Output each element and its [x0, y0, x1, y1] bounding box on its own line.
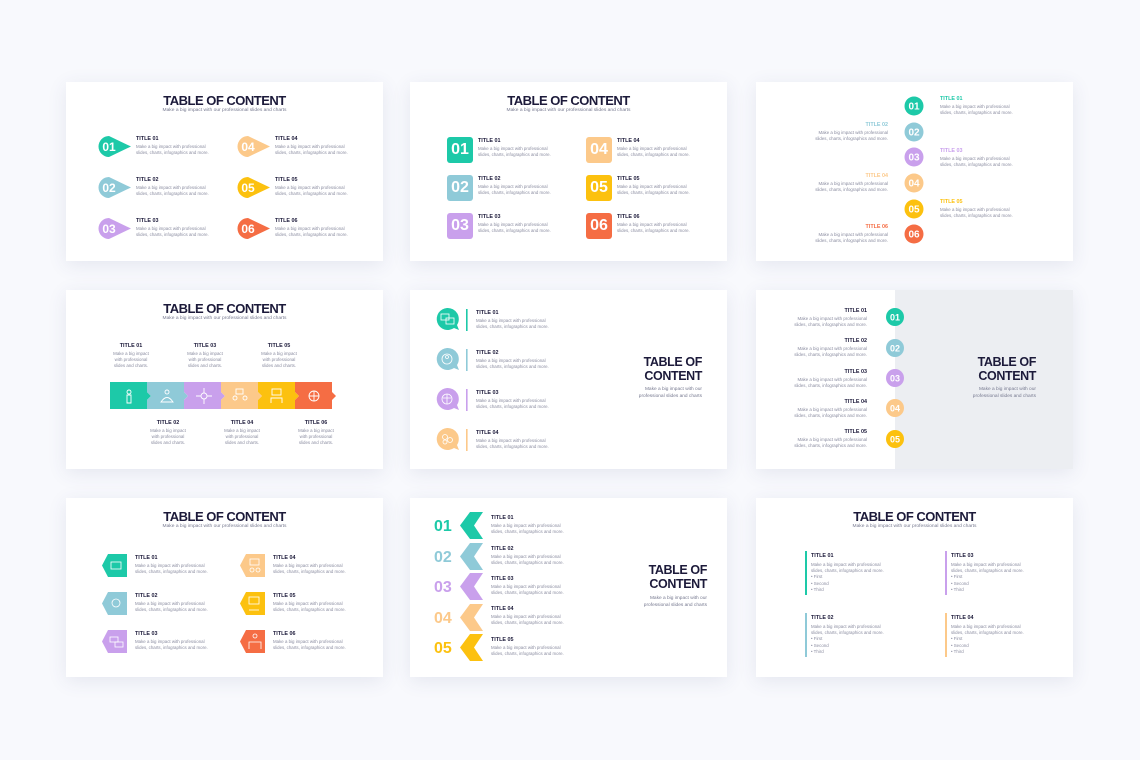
slide 1: drop markers: Make a big impact with professional: [275, 185, 345, 190]
slide 7: hexagon tags: Make a big impact with professional: [273, 601, 343, 606]
slide 5: speech bubbles: [410, 290, 727, 469]
slide 4: arrow chain: [66, 290, 383, 469]
markers: 04: [241, 140, 255, 154]
slide 6: split with circles: Make a big impact with professional: [797, 377, 867, 382]
slide 2: square numbers: slides, charts, infographics and more.: [617, 190, 690, 195]
slide 1: drop markers: TITLE 06: [275, 218, 297, 224]
markers: [98, 136, 270, 239]
side subtitle: Make a big impact with our: [650, 596, 707, 601]
slide 4: arrow chain: TITLE 03: [194, 343, 216, 349]
slide 7: hexagon tags: TITLE 06: [273, 631, 295, 637]
side heading: CONTENT: [649, 577, 707, 591]
slide 9: bullet columns: Make a big impact with professional: [951, 624, 1021, 629]
slide 9: bullet columns: • Second: [951, 581, 969, 586]
markers: 05: [241, 181, 255, 195]
slide 5: speech bubbles: TITLE 01: [476, 310, 498, 316]
heading: TABLE OF CONTENT: [163, 509, 286, 524]
slide 2: square numbers: TITLE 01: [478, 138, 500, 144]
subtitle: Make a big impact with our professional slides and charts: [853, 524, 976, 529]
slide 1: drop markers: TITLE 05: [275, 177, 297, 183]
slide 6: split with circles: slides, charts, infographics and more.: [794, 352, 867, 357]
side heading: CONTENT: [644, 369, 702, 383]
slide 9: bullet columns: • Third: [811, 587, 824, 592]
circles: 01: [908, 102, 920, 112]
slide 4: arrow chain: with professional: [189, 357, 221, 362]
chevrons and numbers: [434, 512, 483, 661]
chevrons and numbers: 03: [434, 579, 452, 596]
square 02: 02: [451, 179, 469, 196]
slide 3: vertical circle timeline: Make a big impact with professional: [818, 181, 888, 186]
side subtitle: Make a big impact with our: [979, 387, 1036, 392]
tags: [102, 554, 265, 653]
white panel: [756, 290, 895, 469]
slide 9: bullet columns: TITLE 01: [811, 553, 833, 559]
slide 8: chevron list: slides, charts, infographics and more.: [491, 560, 564, 565]
markers: 03: [102, 222, 116, 236]
circles: 05: [890, 434, 900, 444]
slide 9: bullet columns: [756, 498, 1073, 677]
circles: 02: [908, 128, 920, 138]
slide 6: split with circles: slides, charts, infographics and more.: [794, 322, 867, 327]
side heading: TABLE OF: [978, 355, 1036, 369]
bubbles: [436, 308, 468, 451]
square 05: 05: [590, 179, 608, 196]
slide 4: arrow chain: TITLE 04: [231, 420, 253, 426]
markers: 02: [102, 181, 116, 195]
slide 2: square numbers: TITLE 04: [617, 138, 639, 144]
slide 1: drop markers: TITLE 02: [136, 177, 158, 183]
slide 4: arrow chain: with professional: [115, 357, 147, 362]
slide 4: arrow chain: with professional: [300, 434, 332, 439]
slide 9: bullet columns: • Third: [811, 649, 824, 654]
slide 3: vertical circle timeline: TITLE 01: [940, 96, 962, 102]
slide 6: split with circles: TITLE 04: [845, 399, 867, 405]
chevrons and numbers: 01: [434, 518, 452, 535]
slide 3: vertical circle timeline: TITLE 06: [866, 224, 888, 230]
slide 1: drop markers: slides, charts, infographics and more.: [136, 232, 209, 237]
side subtitle: professional slides and charts: [973, 394, 1036, 399]
slide 6: split with circles: Make a big impact with professional: [797, 437, 867, 442]
slide 1: drop markers: TITLE 01: [136, 136, 158, 142]
markers: 06: [241, 222, 255, 236]
side subtitle: Make a big impact with our: [645, 387, 702, 392]
slide 3: vertical circle timeline: TITLE 03: [940, 148, 962, 154]
circles: [886, 308, 904, 448]
subtitle: Make a big impact with our professional slides and charts: [163, 316, 286, 321]
slide 6: split with circles: Make a big impact with professional: [797, 346, 867, 351]
heading: TABLE OF CONTENT: [163, 93, 286, 108]
side subtitle: [644, 596, 707, 608]
slide 4: arrow chain: Make a big impact: [261, 351, 297, 356]
slide 3: vertical circle timeline: [756, 82, 1073, 261]
slide 5: speech bubbles: Make a big impact with professional: [476, 398, 546, 403]
slide 5: speech bubbles: TITLE 02: [476, 350, 498, 356]
slide 4: arrow chain: slides and charts.: [188, 363, 222, 368]
circles: 04: [890, 404, 900, 414]
slide 7: hexagon tags: slides, charts, infographics and more.: [273, 607, 346, 612]
slide 1: drop markers: slides, charts, infographics and more.: [136, 191, 209, 196]
circles: 03: [890, 374, 900, 384]
slide 3: vertical circle timeline: Make a big impact with professional: [818, 232, 888, 237]
square 05: [586, 175, 612, 201]
side heading: [978, 355, 1036, 383]
slide 2: square numbers: TITLE 03: [478, 214, 500, 220]
chain: [110, 382, 336, 409]
square 02: [447, 175, 473, 201]
slide 1: drop markers: slides, charts, infographics and more.: [275, 150, 348, 155]
circles: 06: [908, 230, 920, 240]
square 03: [447, 213, 473, 239]
slide 4: arrow chain: with professional: [226, 434, 258, 439]
side heading: TABLE OF: [644, 355, 702, 369]
slide 7: hexagon tags: Make a big impact with professional: [273, 563, 343, 568]
slide 4: arrow chain: slides and charts.: [114, 363, 148, 368]
slide 9: bullet columns: • First: [951, 574, 962, 579]
slide 6: split with circles: TITLE 03: [845, 369, 867, 375]
slide 9: bullet columns: • Second: [811, 581, 829, 586]
slide 9: bullet columns: slides, charts, infographics and more.: [951, 568, 1024, 573]
slide 2: square numbers: Make a big impact with professional: [478, 222, 548, 227]
heading: TABLE OF CONTENT: [853, 509, 976, 524]
slide 9: bullet columns: Make a big impact with professional: [811, 624, 881, 629]
slide 8: chevron list: Make a big impact with professional: [491, 523, 561, 528]
slide 8: chevron list: slides, charts, infographics and more.: [491, 651, 564, 656]
slide 7: hexagon tags: slides, charts, infographics and more.: [135, 569, 208, 574]
slide 9: bullet columns: slides, charts, infographics and more.: [811, 568, 884, 573]
slide 6: split with circles: [756, 290, 1073, 469]
slide 1: drop markers: [66, 82, 383, 261]
slide 4: arrow chain: TITLE 01: [120, 343, 142, 349]
slide 7: hexagon tags: Make a big impact with professional: [135, 601, 205, 606]
slide 4: arrow chain: Make a big impact: [150, 428, 186, 433]
slide 8: chevron list: TITLE 04: [491, 606, 513, 612]
slide 8: chevron list: TITLE 01: [491, 515, 513, 521]
side heading: CONTENT: [978, 369, 1036, 383]
bars: [805, 551, 806, 595]
slide 9: bullet columns: • Third: [951, 649, 964, 654]
slide 4: arrow chain: slides and charts.: [225, 440, 259, 445]
chevrons and numbers: 02: [434, 549, 452, 566]
subtitle: Make a big impact with our professional slides and charts: [163, 108, 286, 113]
slide 8: chevron list: Make a big impact with professional: [491, 614, 561, 619]
side subtitle: [639, 386, 702, 399]
subtitle: Make a big impact with our professional slides and charts: [507, 108, 630, 113]
slide 9: bullet columns: TITLE 04: [951, 615, 973, 621]
slide 7: hexagon tags: slides, charts, infographics and more.: [273, 569, 346, 574]
slide 6: split with circles: Make a big impact with professional: [797, 407, 867, 412]
slide 2: square numbers: slides, charts, infographics and more.: [617, 228, 690, 233]
slide 9: bullet columns: • Second: [951, 643, 969, 648]
slide 7: hexagon tags: Make a big impact with professional: [273, 639, 343, 644]
slide 5: speech bubbles: Make a big impact with professional: [476, 358, 546, 363]
square 04: [586, 137, 612, 163]
slide 5: speech bubbles: Make a big impact with professional: [476, 438, 546, 443]
slide 4: arrow chain: slides and charts.: [299, 440, 333, 445]
slide 1: drop markers: Make a big impact with professional: [136, 226, 206, 231]
square 06: [586, 213, 612, 239]
slide 6: split with circles: slides, charts, infographics and more.: [794, 383, 867, 388]
heading: TABLE OF CONTENT: [507, 93, 630, 108]
slide 2: square numbers: Make a big impact with professional: [617, 146, 687, 151]
side subtitle: [973, 386, 1036, 399]
side subtitle: professional slides and charts: [644, 603, 707, 608]
slide 6: split with circles: slides, charts, infographics and more.: [794, 413, 867, 418]
slide 1: drop markers: slides, charts, infographics and more.: [275, 191, 348, 196]
slide 7: hexagon tags: slides, charts, infographics and more.: [135, 645, 208, 650]
slide 7: hexagon tags: TITLE 05: [273, 593, 295, 599]
slide 9: bullet columns: • First: [811, 574, 822, 579]
slide 8: chevron list: TITLE 02: [491, 546, 513, 552]
slide 7: hexagon tags: TITLE 04: [273, 555, 295, 561]
slide 2: square numbers: [410, 82, 727, 261]
slide 4: arrow chain: Make a big impact: [113, 351, 149, 356]
slide 4: arrow chain: Make a big impact: [187, 351, 223, 356]
slide 9: bullet columns: TITLE 02: [811, 615, 833, 621]
slide 1: drop markers: Make a big impact with professional: [136, 185, 206, 190]
slide 3: vertical circle timeline: slides, charts, infographics and more.: [940, 110, 1013, 115]
slide 8: chevron list: Make a big impact with professional: [491, 584, 561, 589]
slide 9: bullet columns: slides, charts, infographics and more.: [811, 630, 884, 635]
slide 6: split with circles: TITLE 01: [845, 308, 867, 314]
slide 8: chevron list: Make a big impact with professional: [491, 554, 561, 559]
slide 2: square numbers: Make a big impact with professional: [617, 184, 687, 189]
slide 3: vertical circle timeline: Make a big impact with professional: [818, 130, 888, 135]
slide 9: bullet columns: • First: [811, 636, 822, 641]
side subtitle: professional slides and charts: [639, 394, 702, 399]
slide 7: hexagon tags: slides, charts, infographics and more.: [135, 607, 208, 612]
slide 3: vertical circle timeline: slides, charts, infographics and more.: [815, 136, 888, 141]
slide 4: arrow chain: slides and charts.: [262, 363, 296, 368]
slide 9: bullet columns: • Second: [811, 643, 829, 648]
slide 9: bullet columns: • Third: [951, 587, 964, 592]
slide 3: vertical circle timeline: TITLE 02: [866, 122, 888, 128]
slide 4: arrow chain: with professional: [152, 434, 184, 439]
slide 4: arrow chain: TITLE 02: [157, 420, 179, 426]
square 04: 04: [590, 141, 608, 158]
slide 6: split with circles: TITLE 02: [845, 338, 867, 344]
slide 1: drop markers: slides, charts, infographics and more.: [136, 150, 209, 155]
slide 9: bullet columns: Make a big impact with professional: [811, 562, 881, 567]
slide 8: chevron list: TITLE 05: [491, 637, 513, 643]
slide 7: hexagon tags: TITLE 01: [135, 555, 157, 561]
slide 2: square numbers: slides, charts, infographics and more.: [478, 228, 551, 233]
chevrons and numbers: 04: [434, 610, 452, 627]
slide 2: square numbers: TITLE 02: [478, 176, 500, 182]
circles: 04: [908, 178, 920, 190]
circles: 01: [890, 312, 900, 322]
side heading: TABLE OF: [649, 563, 707, 577]
slide 8: chevron list: [410, 498, 727, 677]
slide 2: square numbers: Make a big impact with professional: [617, 222, 687, 227]
slide 1: drop markers: slides, charts, infographics and more.: [275, 232, 348, 237]
slide 9: bullet columns: • First: [951, 636, 962, 641]
slide 5: speech bubbles: slides, charts, infographics and more.: [476, 444, 549, 449]
slide 7: hexagon tags: TITLE 03: [135, 631, 157, 637]
slide 1: drop markers: TITLE 04: [275, 136, 297, 142]
slide 5: speech bubbles: TITLE 03: [476, 390, 498, 396]
slide 7: hexagon tags: [66, 498, 383, 677]
square 01: [447, 137, 473, 163]
slide 1: drop markers: Make a big impact with professional: [275, 144, 345, 149]
slide 5: speech bubbles: slides, charts, infographics and more.: [476, 364, 549, 369]
slide 8: chevron list: slides, charts, infographics and more.: [491, 590, 564, 595]
slide 4: arrow chain: Make a big impact: [298, 428, 334, 433]
slide 4: arrow chain: Make a big impact: [224, 428, 260, 433]
slide 1: drop markers: TITLE 03: [136, 218, 158, 224]
slide 4: arrow chain: TITLE 05: [268, 343, 290, 349]
slide 7: hexagon tags: Make a big impact with professional: [135, 639, 205, 644]
markers: 01: [102, 140, 116, 154]
slide 3: vertical circle timeline: Make a big impact with professional: [940, 156, 1010, 161]
slide 3: vertical circle timeline: TITLE 05: [940, 199, 962, 205]
circles: 02: [890, 344, 900, 354]
square 01: 01: [451, 141, 469, 158]
slide 5: speech bubbles: slides, charts, infographics and more.: [476, 404, 549, 409]
slide 2: square numbers: TITLE 05: [617, 176, 639, 182]
circles: 03: [908, 152, 920, 164]
heading: TABLE OF CONTENT: [163, 301, 286, 316]
slide 4: arrow chain: slides and charts.: [151, 440, 185, 445]
slide 6: split with circles: TITLE 05: [845, 429, 867, 435]
slide 3: vertical circle timeline: slides, charts, infographics and more.: [815, 238, 888, 243]
side heading: [644, 355, 702, 383]
slide 8: chevron list: slides, charts, infographics and more.: [491, 529, 564, 534]
slide 9: bullet columns: Make a big impact with professional: [951, 562, 1021, 567]
slide 1: drop markers: Make a big impact with professional: [136, 144, 206, 149]
slide 8: chevron list: Make a big impact with professional: [491, 645, 561, 650]
slide 6: split with circles: Make a big impact with professional: [797, 316, 867, 321]
chevrons and numbers: 05: [434, 640, 452, 657]
slide 9: bullet columns: slides, charts, infographics and more.: [951, 630, 1024, 635]
slide 5: speech bubbles: TITLE 04: [476, 430, 498, 436]
slide 3: vertical circle timeline: slides, charts, infographics and more.: [815, 187, 888, 192]
slide 2: square numbers: Make a big impact with professional: [478, 146, 548, 151]
slide 2: square numbers: slides, charts, infographics and more.: [478, 190, 551, 195]
slide 5: speech bubbles: slides, charts, infographics and more.: [476, 324, 549, 329]
circles: 05: [908, 204, 920, 216]
slide 2: square numbers: slides, charts, infographics and more.: [478, 152, 551, 157]
slide 7: hexagon tags: TITLE 02: [135, 593, 157, 599]
slide 7: hexagon tags: slides, charts, infographics and more.: [273, 645, 346, 650]
slide 3: vertical circle timeline: Make a big impact with professional: [940, 104, 1010, 109]
subtitle: Make a big impact with our professional slides and charts: [163, 524, 286, 529]
slide 4: arrow chain: TITLE 06: [305, 420, 327, 426]
slide 2: square numbers: slides, charts, infographics and more.: [617, 152, 690, 157]
square 06: 06: [590, 217, 608, 234]
slide 1: drop markers: Make a big impact with professional: [275, 226, 345, 231]
slide 8: chevron list: TITLE 03: [491, 576, 513, 582]
square 03: 03: [451, 217, 469, 234]
slide 2: square numbers: Make a big impact with professional: [478, 184, 548, 189]
slide 9: bullet columns: TITLE 03: [951, 553, 973, 559]
slide 6: split with circles: slides, charts, infographics and more.: [794, 443, 867, 448]
slide 3: vertical circle timeline: slides, charts, infographics and more.: [940, 162, 1013, 167]
slide 3: vertical circle timeline: TITLE 04: [866, 173, 888, 179]
slide 5: speech bubbles: Make a big impact with professional: [476, 318, 546, 323]
slide 3: vertical circle timeline: Make a big impact with professional: [940, 207, 1010, 212]
side heading: [648, 563, 708, 591]
slide 3: vertical circle timeline: slides, charts, infographics and more.: [940, 213, 1013, 218]
slide 7: hexagon tags: Make a big impact with professional: [135, 563, 205, 568]
slide 4: arrow chain: with professional: [263, 357, 295, 362]
slide 2: square numbers: TITLE 06: [617, 214, 639, 220]
slide 8: chevron list: slides, charts, infographics and more.: [491, 620, 564, 625]
circles: [904, 96, 924, 244]
